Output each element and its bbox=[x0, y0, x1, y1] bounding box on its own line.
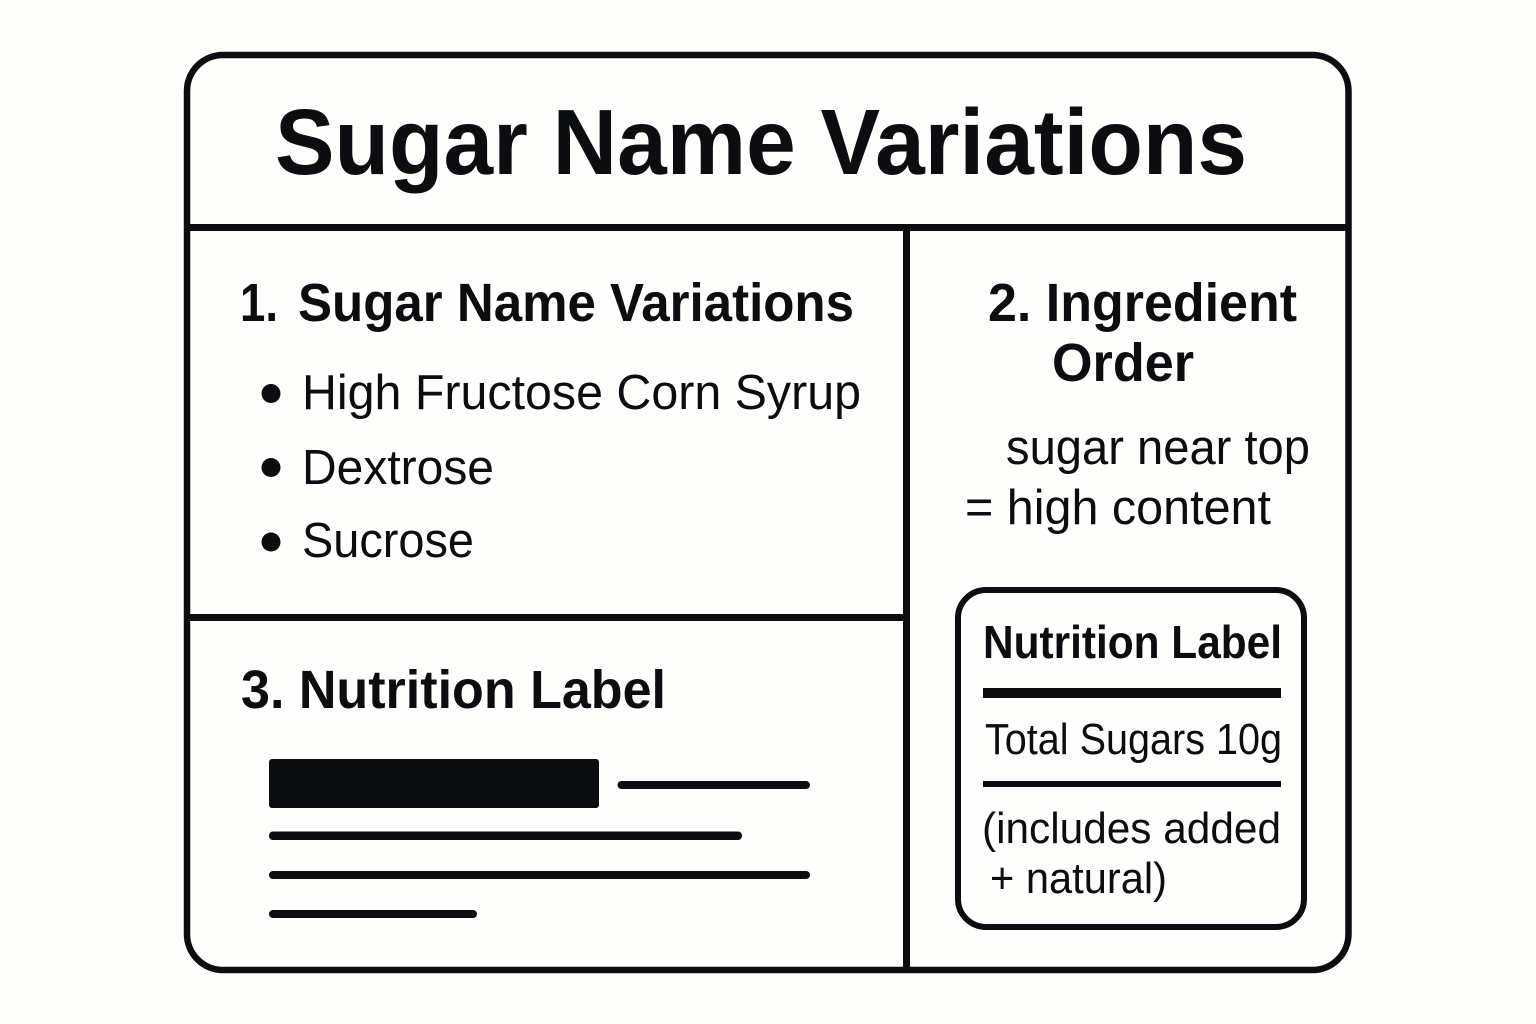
panel heading: section 1: 1. bbox=[240, 273, 278, 333]
nutrition label mini card: (includes added bbox=[982, 804, 1281, 853]
panel heading: section 1: Sugar Name Variations bbox=[298, 273, 854, 333]
panel: sugar name variations bbox=[240, 273, 861, 568]
nutrition label mini card: Total Sugars 10g bbox=[985, 715, 1282, 764]
ingredient order explanation: = high content bbox=[965, 480, 1271, 535]
bullet list of sugar names bbox=[262, 365, 861, 568]
nutrition label mini card: Nutrition Label bbox=[983, 616, 1282, 668]
bullet list of sugar names: Sucrose bbox=[302, 513, 474, 568]
nutrition label mini card bbox=[958, 590, 1304, 927]
nutrition label mini card: + natural) bbox=[990, 854, 1167, 903]
panel heading: section 2 bbox=[988, 273, 1297, 393]
bullet list of sugar names: Dextrose bbox=[302, 440, 494, 495]
ingredient order explanation: sugar near top bbox=[1006, 420, 1310, 475]
panel heading: section 2: Order bbox=[1052, 333, 1194, 393]
label illustration: bar and lines bbox=[269, 759, 810, 918]
bullet list of sugar names: High Fructose Corn Syrup bbox=[302, 365, 861, 420]
title: Sugar Name Variations bbox=[275, 90, 1247, 194]
panel heading: section 2: 2. Ingredient bbox=[988, 273, 1297, 333]
panel: nutrition label bbox=[241, 660, 810, 918]
panel: ingredient order bbox=[958, 273, 1310, 927]
ingredient order explanation bbox=[965, 420, 1310, 535]
panel heading: section 3: 3. Nutrition Label bbox=[241, 660, 666, 720]
outer card frame bbox=[187, 55, 1348, 970]
